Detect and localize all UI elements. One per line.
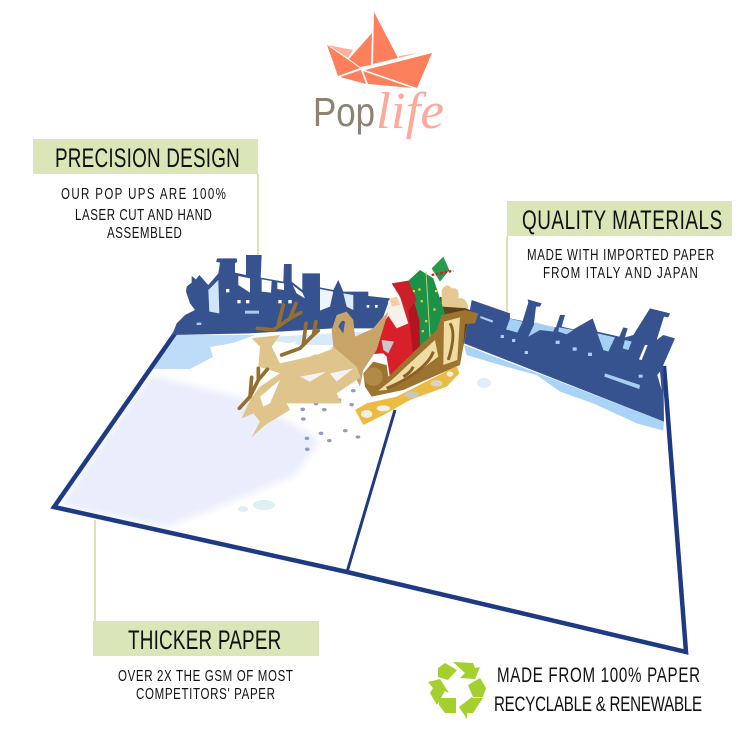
sleigh back panel	[437, 297, 470, 347]
gift sack	[407, 257, 453, 353]
panel: quality materials callout: FROM ITALY AND JAPAN	[543, 263, 698, 281]
panel: thicker paper callout	[93, 621, 319, 702]
card border	[54, 332, 686, 652]
snow: left blue	[149, 335, 255, 369]
panel: thicker paper callout: OVER 2X THE GSM OF MOST	[118, 666, 293, 684]
panel: quality materials callout	[507, 201, 732, 281]
panel: precision design callout: PRECISION DESIGN	[55, 143, 240, 173]
logo	[313, 12, 444, 140]
right skyline windows	[480, 316, 643, 389]
reindeer	[242, 335, 361, 437]
right snow strip	[464, 345, 664, 431]
text: recyclable statement: RECYCLABLE & RENEWABLE	[494, 691, 702, 716]
sleigh front curl	[332, 312, 388, 387]
text: recyclable statement: MADE FROM 100% PAPER	[497, 662, 700, 687]
logo wordmark: Pop	[313, 89, 375, 135]
panel: thicker paper callout: THICKER PAPER	[128, 625, 281, 655]
reindeer harness cutouts	[260, 342, 353, 407]
panel: quality materials callout: MADE WITH IMPORTED PAPER	[527, 245, 714, 263]
santa	[358, 281, 420, 377]
sleigh, santa and reindeer	[239, 257, 478, 451]
footprints	[300, 389, 360, 451]
illustration: pop-up card	[52, 255, 688, 653]
panel: precision design callout: LASER CUT AND HAND	[75, 205, 212, 223]
right skyline	[464, 299, 675, 431]
left skyline	[170, 255, 390, 340]
guide lines	[94, 174, 508, 621]
sleigh body	[363, 310, 478, 397]
panel: precision design callout: ASSEMBLED	[107, 223, 182, 241]
panel: precision design callout	[33, 139, 258, 241]
logo wordmark: life	[376, 83, 444, 140]
card panels	[52, 330, 688, 653]
logo wordmark	[313, 83, 444, 140]
panel: thicker paper callout: COMPETITORS' PAPER	[136, 684, 275, 702]
left skyline windows	[197, 276, 378, 325]
reindeer antlers	[239, 303, 318, 408]
icon: origami boat	[327, 12, 432, 88]
sleigh runner	[355, 366, 459, 425]
snow dots	[238, 378, 491, 512]
panel: quality materials callout: QUALITY MATERIALS	[522, 205, 722, 235]
text: recyclable statement	[494, 662, 702, 716]
icon: recycling symbol	[428, 662, 486, 719]
panel: precision design callout: OUR POP UPS ARE 100%	[61, 184, 226, 202]
snow: left lavender	[60, 375, 320, 527]
